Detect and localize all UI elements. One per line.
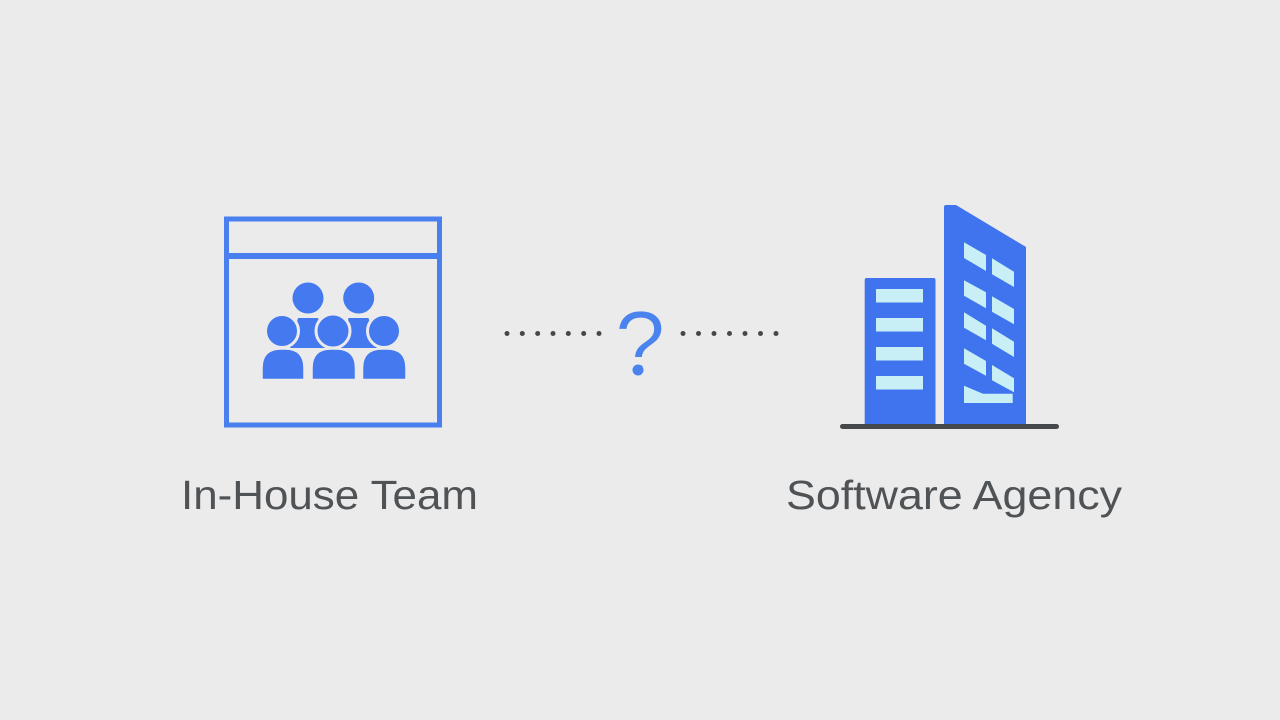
front row bodies xyxy=(262,349,406,380)
ground line xyxy=(840,424,1059,429)
icon: in-house team window xyxy=(225,219,441,425)
label: software agency: Software Agency xyxy=(786,472,1123,518)
front row heads xyxy=(266,314,400,348)
icon: software agency buildings xyxy=(840,205,1059,429)
short building xyxy=(865,278,936,426)
tall building xyxy=(944,205,1026,426)
short building windows xyxy=(876,289,923,390)
team of people xyxy=(262,282,406,380)
window title bar divider xyxy=(225,253,441,259)
back row torsos xyxy=(290,318,377,348)
label: in-house team: In-House Team xyxy=(181,472,478,518)
back row heads xyxy=(292,282,374,314)
dotted connector: left xyxy=(504,331,602,336)
dotted connector: right xyxy=(680,331,778,336)
tall building windows xyxy=(964,242,1014,403)
question mark: ? xyxy=(615,294,665,394)
window frame xyxy=(226,219,440,425)
